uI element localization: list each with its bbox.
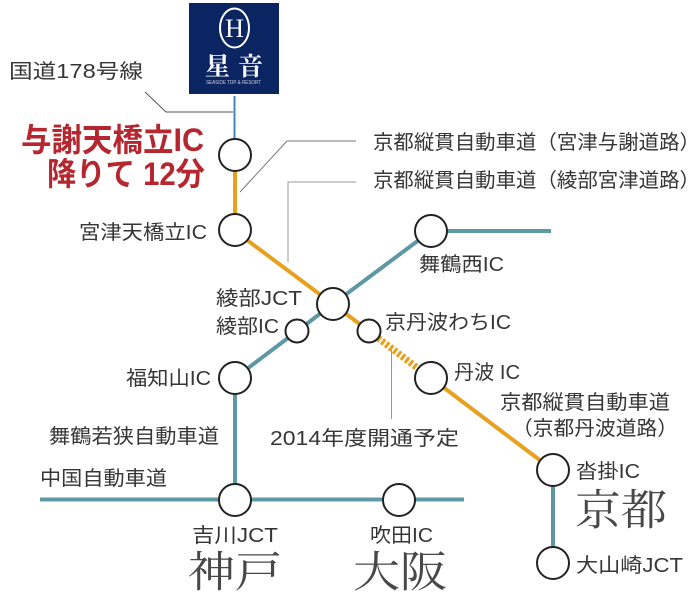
city label: Kyoto: 京都 [575,488,667,535]
interchange nodes [219,139,569,579]
logo: Hoshioto hotel: H [225,14,244,43]
road: Chugoku expressway [40,498,464,502]
callout: 12 minutes from Yosa Amanohashidate IC: 降りて 12分 [47,156,205,192]
callout: 12 minutes from Yosa Amanohashidate IC: 与謝天橋立IC [21,122,204,158]
road and IC labels: （京都丹波道路） [512,417,678,440]
road and IC labels: 舞鶴西IC [419,253,504,276]
city label: Kobe: 神戸 [188,550,282,597]
road and IC labels: 沓掛IC [576,460,640,483]
road: Miyazu Yosa section [233,170,237,215]
logo: Hoshioto hotel [189,3,279,94]
leader lines [145,92,392,419]
road: Ayabe Miyazu section [247,240,369,331]
road: planned 2014 section [378,338,420,370]
road and IC labels: 中国自動車道 [40,467,167,490]
road and IC labels: 2014年度開通予定 [270,427,459,450]
road: national route 178 [234,96,236,140]
city label: Osaka: 大阪 [353,550,447,597]
road and IC labels: 京都縦貫自動車道（宮津与謝道路） [373,131,699,154]
road: Kyoto Tamba section [443,387,541,461]
road and IC labels: 吹田IC [370,524,433,547]
road and IC labels: 京丹波わちIC [385,311,511,334]
logo: Hoshioto hotel: SEASIDE TOP & RESORT [206,80,261,86]
road: Maizuru Wakasa north-south [233,378,237,499]
road and IC labels: 大山崎JCT [576,554,683,577]
road and IC labels: 京都縦貫自動車道（綾部宮津道路） [373,169,699,192]
logo: Hoshioto hotel: 星 [205,53,230,81]
road and IC labels: 国道178号線 [9,60,143,83]
logo: Hoshioto hotel: 音 [238,53,263,81]
road and IC labels: 舞鶴若狭自動車道 [49,425,219,448]
road and IC labels: 吉川JCT [192,524,278,547]
callout: 12 minutes from Yosa Amanohashidate IC [21,122,205,192]
road and IC labels: 京都縦貫自動車道 [500,391,670,414]
road: Maizuru Wakasa expressway [235,231,551,378]
road and IC labels: 丹波 IC [454,361,520,384]
road and IC labels: 福知山IC [126,367,211,390]
road: Kutsukake to Oyamazaki [551,470,555,563]
road and IC labels: 綾部IC [216,315,279,338]
road and IC labels: 綾部JCT [216,287,302,310]
road and IC labels: 宮津天橋立IC [79,221,207,244]
